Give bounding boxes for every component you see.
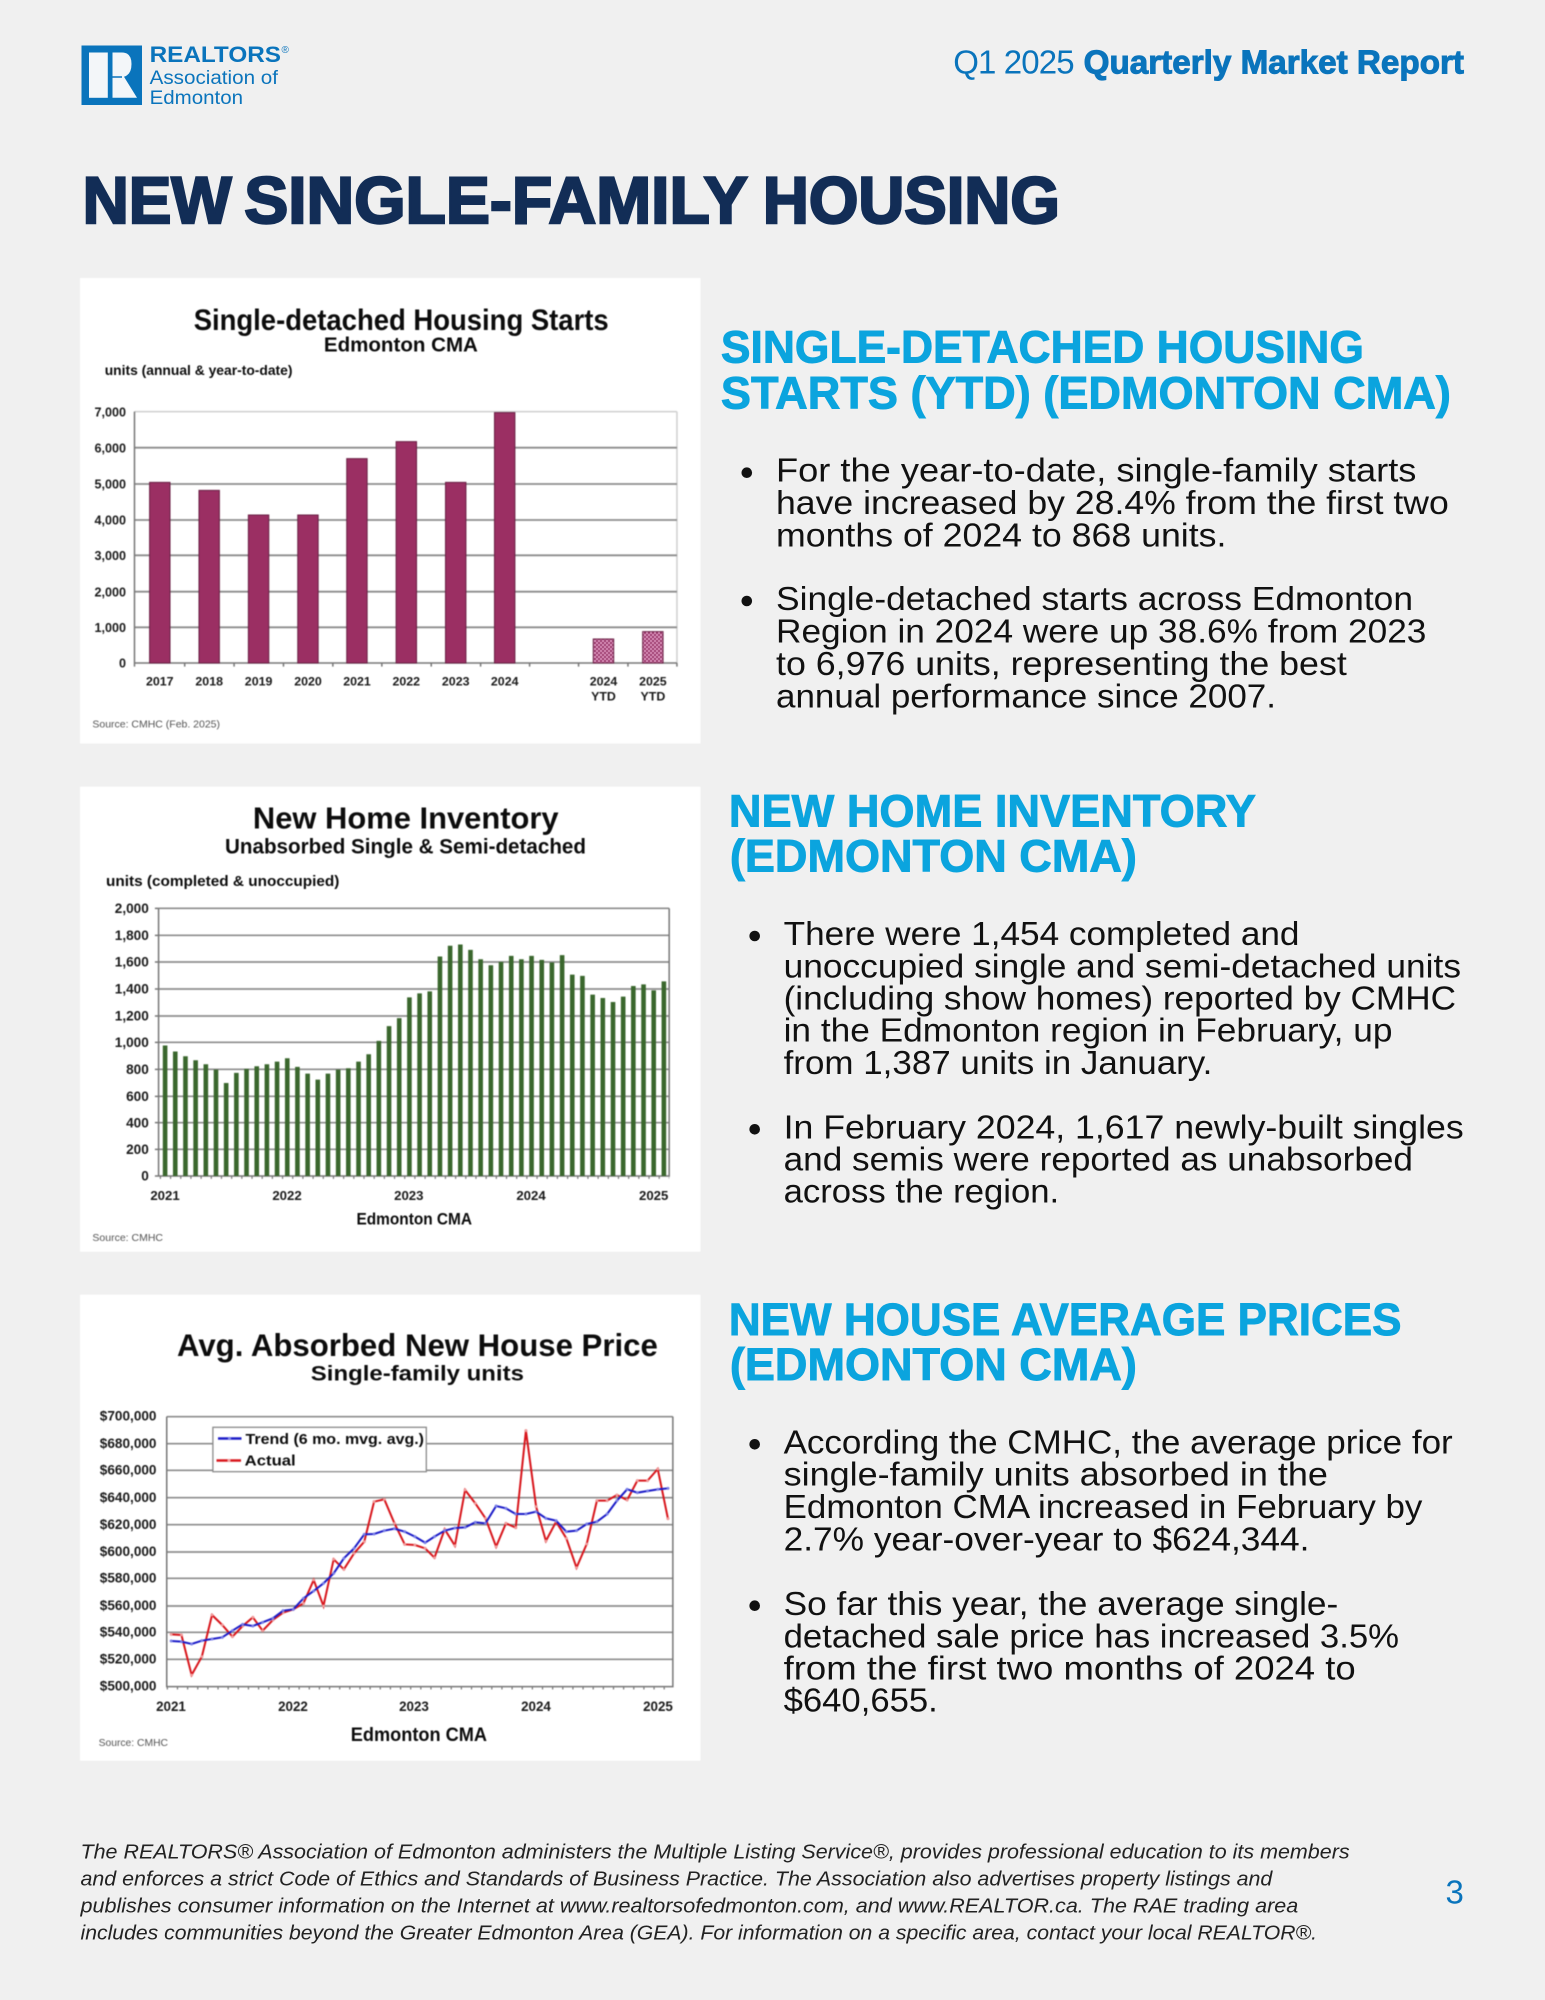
y axis labels: 5,000 [94, 478, 126, 492]
axis unit label: units (completed & unoccupied) [106, 873, 339, 890]
bullet: February average price: 2.7% year-over-year to $624,344. [784, 1520, 1310, 1557]
x axis labels: 2025 [639, 1188, 668, 1203]
axis title: Edmonton CMA [351, 1725, 487, 1746]
logo wordmark: ® [282, 45, 290, 56]
bullet: February 2024 comparison [749, 1108, 1464, 1210]
bullet: 2024 annual starts: Region in 2024 were up 38.6% from 2023 [776, 612, 1426, 649]
bullet: year-to-date sale price: $640,655. [784, 1682, 938, 1719]
y axis labels: 1,800 [115, 928, 149, 943]
y axis labels: $580,000 [100, 1570, 156, 1586]
x axis labels: 2024 [521, 1699, 551, 1714]
bullet: year-to-date sale price [749, 1585, 1399, 1719]
y axis labels: $660,000 [100, 1462, 156, 1478]
footer disclaimer: and enforces a strict Code of Ethics and Standards of Business Practice. The Association also advertises property listings and [80, 1869, 1273, 1891]
bullet: February 2024 comparison: and semis were reported as unabsorbed [784, 1141, 1413, 1178]
logo wordmark: Edmonton [150, 88, 243, 109]
y axis labels: $620,000 [100, 1517, 156, 1532]
title: SINGLE-FAMILY [244, 163, 748, 237]
y axis labels [100, 1408, 156, 1694]
footer disclaimer: publishes consumer information on the Internet at www.realtorsofedmonton.com, and www.REALTOR.ca. The RAE trading area [79, 1896, 1298, 1918]
x axis labels: 2023 [442, 675, 470, 689]
bullet: year-to-date sale price: detached sale price has increased 3.5% [784, 1617, 1399, 1654]
logo wordmark [150, 42, 290, 109]
x axis labels: 2019 [245, 675, 272, 689]
y axis labels: $560,000 [100, 1598, 156, 1613]
y axis labels: 7,000 [94, 405, 126, 419]
footer disclaimer [79, 1841, 1350, 1944]
title: NEW [83, 163, 232, 237]
y axis labels: 2,000 [115, 901, 149, 916]
x axis labels: YTD [641, 689, 665, 703]
legend [213, 1427, 426, 1472]
chart title: Edmonton CMA [324, 334, 478, 357]
report label: Quarterly Market Report [1084, 43, 1464, 80]
footer disclaimer: The REALTORS® Association of Edmonton administers the Multiple Listing Service®, provides professional education to its members [80, 1841, 1350, 1863]
chart title [194, 304, 609, 357]
y axis labels: 600 [126, 1089, 149, 1104]
source note: Source: CMHC [92, 1232, 163, 1244]
x axis labels: 2023 [394, 1188, 423, 1203]
bullet: February average price: single-family units absorbed in the [784, 1456, 1328, 1493]
bullet: February 2024 comparison: In February 2024, 1,617 newly-built singles [784, 1108, 1464, 1145]
chart title: Single-family units [311, 1362, 524, 1386]
bullet: February 2024 comparison: across the region. [784, 1173, 1059, 1210]
legend: Trend (6 mo. mvg. avg.) [246, 1431, 424, 1448]
axis unit label: units (annual & year-to-date) [105, 362, 292, 378]
footer disclaimer: includes communities beyond the Greater Edmonton Area (GEA). For information on a specific area, contact your local REALTOR®. [80, 1922, 1317, 1944]
x axis labels [156, 1699, 673, 1714]
y axis labels: 0 [141, 1169, 149, 1184]
panel: single-detached housing starts chart [80, 278, 700, 744]
chart title: Unabsorbed Single & Semi-detached [225, 835, 586, 858]
y axis labels: 200 [126, 1142, 149, 1157]
logo wordmark: REALTORS [150, 42, 281, 67]
y axis labels: 1,200 [115, 1009, 149, 1024]
y axis labels: 400 [126, 1115, 149, 1130]
heading: SINGLE-DETACHED HOUSING [721, 322, 1364, 373]
y axis labels: 1,000 [115, 1035, 149, 1050]
title: HOUSING [763, 163, 1060, 237]
y axis labels [94, 405, 126, 671]
chart title [225, 801, 586, 858]
y axis labels: $500,000 [100, 1678, 156, 1694]
bullet: 2024 annual starts: Single-detached starts across Edmonton [776, 580, 1413, 617]
title [83, 163, 1060, 237]
bullet: year-to-date starts: months of 2024 to 868 units. [776, 517, 1226, 554]
x axis labels: 2024 [516, 1188, 546, 1203]
heading: (EDMONTON CMA) [730, 831, 1137, 882]
y axis labels: 2,000 [94, 585, 126, 599]
bullet: 2024 annual starts: annual performance since 2007. [776, 677, 1276, 714]
bullet: February average price: Edmonton CMA increased in February by [784, 1488, 1423, 1525]
y axis labels: 800 [126, 1062, 149, 1077]
bullet: year-to-date sale price: So far this year, the average single- [784, 1585, 1338, 1622]
heading: STARTS (YTD) (EDMONTON CMA) [721, 367, 1451, 418]
section: single-detached housing starts [721, 322, 1451, 714]
chart title: Single-detached Housing Starts [194, 304, 609, 337]
heading [729, 786, 1256, 882]
heading: NEW HOME INVENTORY [729, 786, 1256, 837]
section: new home inventory [729, 786, 1464, 1210]
bullet: year-to-date starts: have increased by 28.4% from the first two [776, 484, 1449, 521]
y axis labels: 0 [119, 657, 126, 671]
y axis labels [115, 901, 149, 1184]
bullet: 2024 annual starts: to 6,976 units, representing the best [776, 645, 1347, 682]
x axis labels: 2021 [156, 1699, 186, 1714]
series: actual [171, 1431, 668, 1675]
series: trend [171, 1488, 668, 1644]
page number: 3 [1446, 1873, 1464, 1910]
logo wordmark: Association of [150, 68, 279, 89]
x axis labels: 2017 [146, 675, 174, 689]
bullet: completed and unoccupied units: unoccupied single and semi-detached units [784, 947, 1461, 984]
y axis labels: $520,000 [100, 1652, 156, 1666]
chart title: New Home Inventory [253, 801, 559, 835]
y axis labels: 1,000 [94, 621, 126, 635]
section: new house average prices [729, 1294, 1453, 1719]
panel: average absorbed new house price chart [80, 1295, 700, 1761]
y axis labels: 1,600 [115, 955, 149, 970]
bullet: completed and unoccupied units: in the Edmonton region in February, up [784, 1012, 1392, 1049]
x axis labels: 2023 [399, 1699, 429, 1714]
x axis labels: 2022 [272, 1188, 302, 1203]
heading [729, 1294, 1402, 1390]
heading: NEW HOUSE AVERAGE PRICES [729, 1294, 1402, 1345]
logo: REALTORS Association of Edmonton [82, 42, 290, 109]
y axis labels: $640,000 [100, 1490, 156, 1505]
bullet: year-to-date starts: For the year-to-date, single-family starts [776, 452, 1416, 489]
bar chart: monthly inventory [155, 908, 669, 1177]
axis title: Edmonton CMA [356, 1210, 472, 1228]
y axis labels: 6,000 [94, 441, 126, 455]
bullet: February average price [749, 1423, 1453, 1557]
x axis labels [150, 1188, 668, 1203]
bullet: year-to-date sale price: from the first two months of 2024 to [784, 1649, 1356, 1686]
x axis labels: 2025 [639, 675, 667, 689]
bullet: February average price: According the CMHC, the average price for [784, 1423, 1453, 1460]
y axis labels: 1,400 [115, 982, 149, 997]
x axis labels: 2024 [590, 675, 617, 689]
x axis labels: 2024 [491, 675, 519, 689]
chart title: Avg. Absorbed New House Price [177, 1327, 658, 1363]
y axis labels: $680,000 [100, 1436, 156, 1451]
heading: (EDMONTON CMA) [730, 1339, 1137, 1390]
x axis labels: 2025 [643, 1699, 673, 1714]
bullet: completed and unoccupied units: There were 1,454 completed and [784, 915, 1300, 952]
y axis labels: 3,000 [94, 549, 126, 563]
bullet: completed and unoccupied units: (including show homes) reported by CMHC [784, 979, 1456, 1016]
bullet: completed and unoccupied units: from 1,387 units in January. [784, 1044, 1212, 1081]
x axis labels [146, 675, 667, 703]
y axis labels: $600,000 [100, 1544, 156, 1559]
legend: Actual [245, 1453, 296, 1470]
x axis labels: 2022 [393, 675, 420, 689]
y axis labels: $700,000 [100, 1408, 156, 1424]
x axis labels: 2021 [343, 675, 371, 689]
y axis labels: 4,000 [94, 514, 126, 528]
heading [721, 322, 1451, 418]
bullet: 2024 annual starts [742, 580, 1426, 714]
x axis labels: YTD [591, 689, 616, 703]
bar chart: annual starts [134, 412, 677, 667]
x axis labels: 2021 [150, 1188, 180, 1203]
bullet: completed and unoccupied units [749, 915, 1461, 1081]
bullet: year-to-date starts [742, 452, 1449, 554]
panel: new home inventory chart [80, 787, 700, 1252]
icon: R block mark [82, 46, 142, 105]
x axis labels: 2020 [294, 675, 322, 689]
line chart: price trend and actual [167, 1417, 673, 1688]
x axis labels: 2022 [278, 1699, 308, 1714]
source note: Source: CMHC [99, 1737, 168, 1749]
x axis labels: 2018 [195, 675, 223, 689]
y axis labels: $540,000 [100, 1624, 156, 1640]
chart title [177, 1327, 658, 1386]
source note: Source: CMHC (Feb. 2025) [92, 719, 220, 731]
report label: Q1 2025 [953, 43, 1075, 80]
